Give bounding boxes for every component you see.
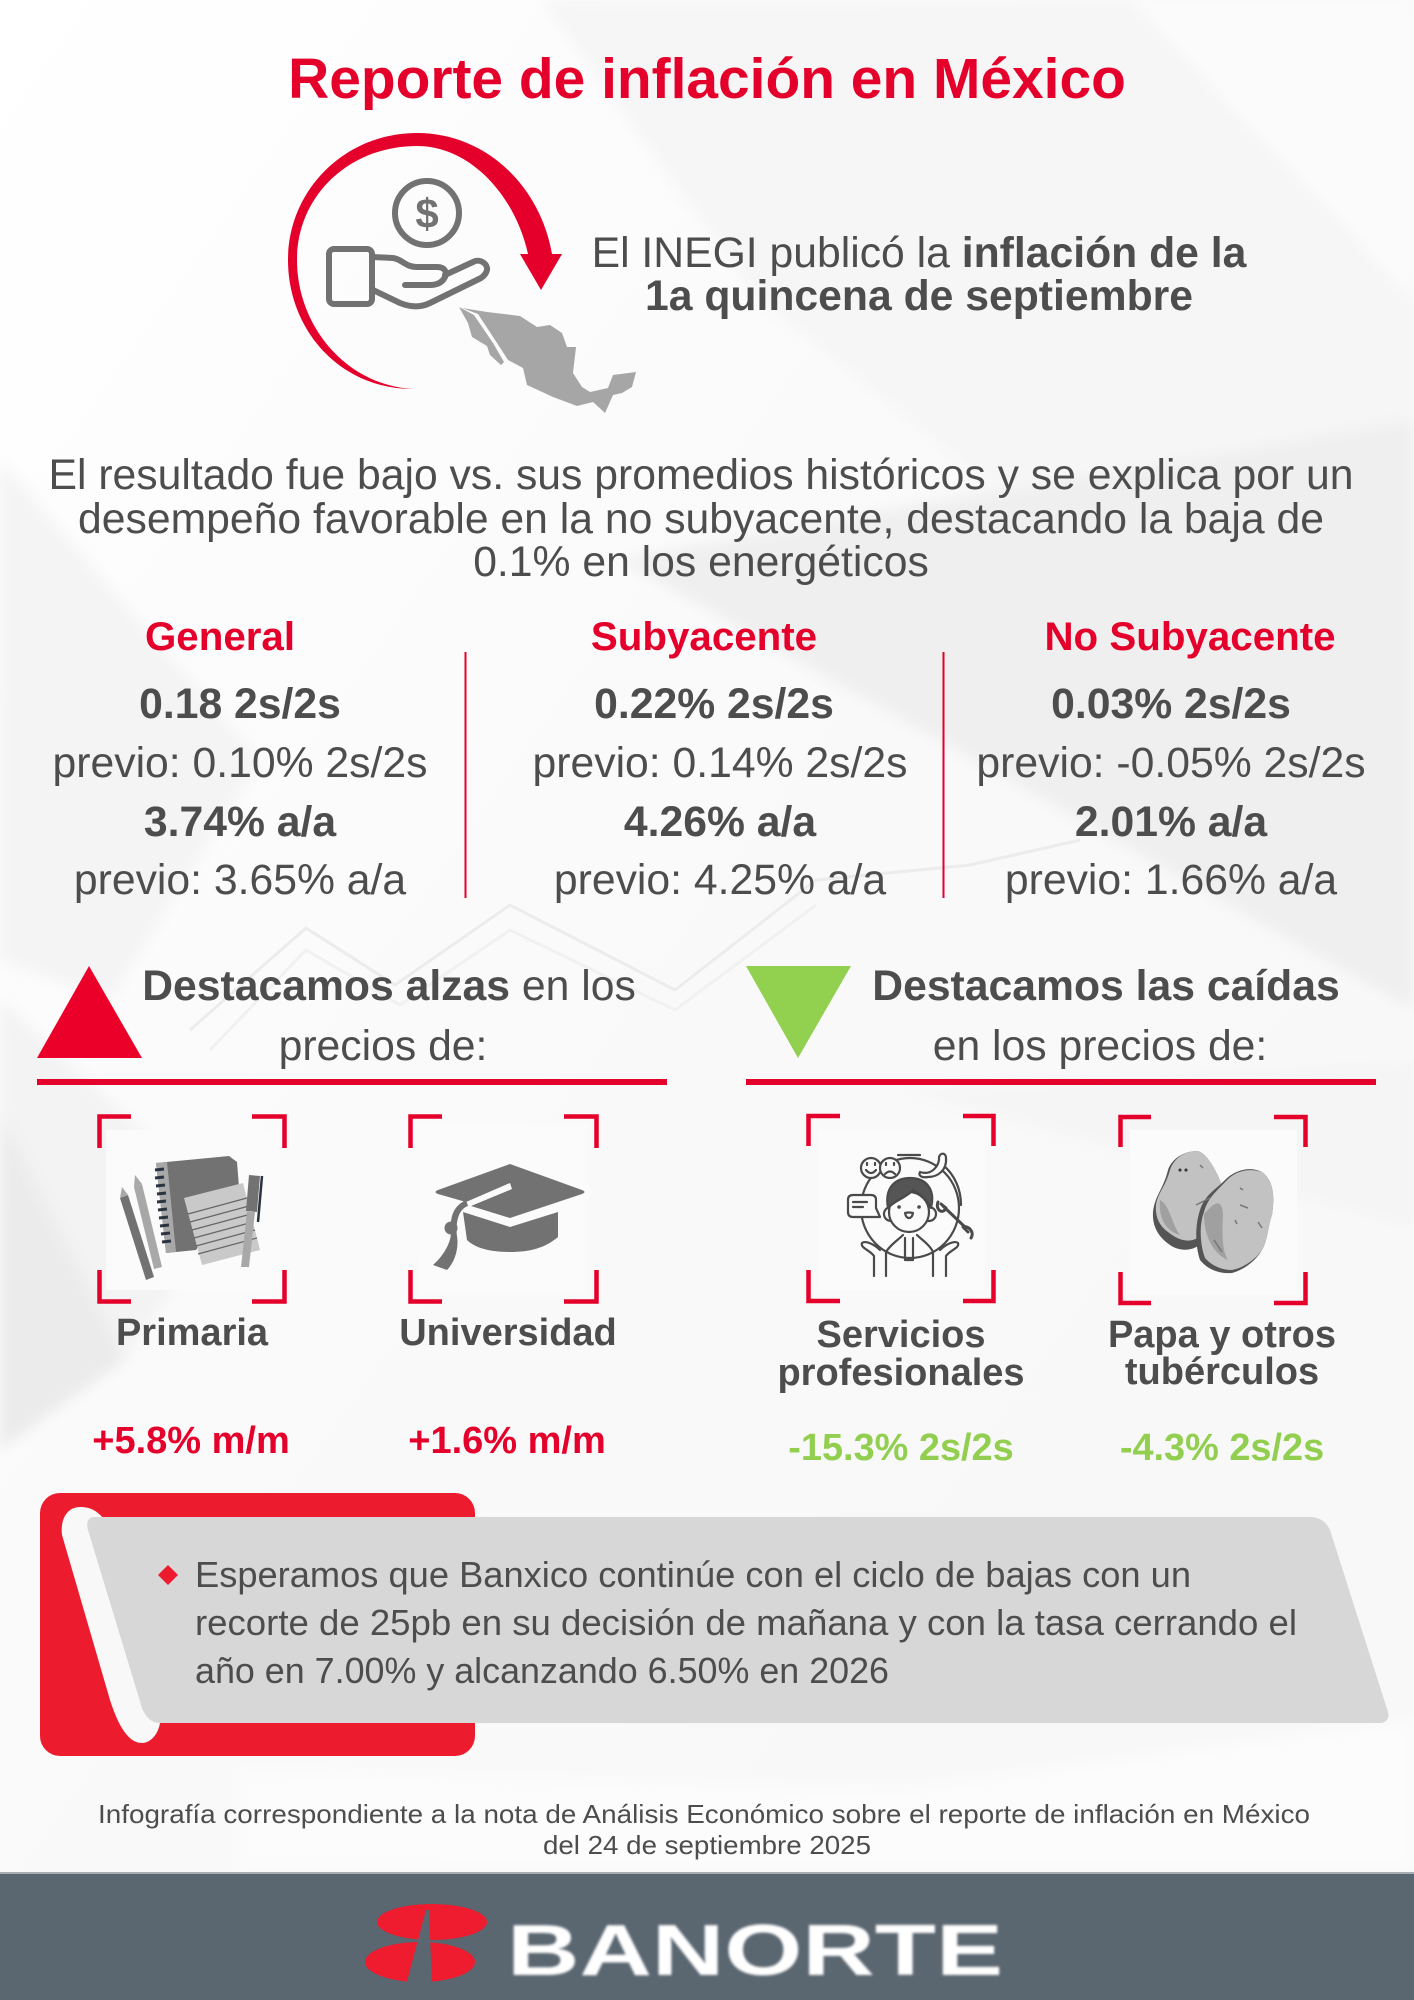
- bullet: [158, 1565, 178, 1585]
- icon: map of Mexico: [459, 307, 636, 413]
- heading: No Subyacente: No Subyacente: [1044, 614, 1336, 659]
- icon: potatoes: [1153, 1151, 1273, 1273]
- heading: caídas: Destacamos las caídas: [872, 962, 1340, 1010]
- heading: alzas: Destacamos alzas en los: [142, 962, 636, 1010]
- label: Papa y otros tubérculos: Papa y otros: [1108, 1314, 1336, 1356]
- heading: caídas: en los precios de:: [933, 1022, 1267, 1070]
- icon: service person: [848, 1154, 972, 1276]
- label: Servicios profesionales: Servicios: [816, 1314, 986, 1356]
- panel: General: [53, 614, 427, 904]
- intro text: [592, 229, 1248, 320]
- footnote: del 24 de septiembre 2025: [543, 1830, 871, 1860]
- summary paragraph: [48, 451, 1354, 586]
- item: Papa y otros tubérculos: [1120, 1117, 1306, 1303]
- heading: General: General: [145, 614, 295, 659]
- panel: No Subyacente: [976, 614, 1366, 904]
- panel: General: 3.74% a/a: [144, 798, 337, 846]
- panel: No Subyacente: previo: 1.66% a/a: [1005, 856, 1337, 904]
- heading: caídas: [872, 962, 1340, 1070]
- summary paragraph: El resultado fue bajo vs. sus promedios históricos y se explica por un: [48, 451, 1354, 499]
- label: Papa y otros tubérculos: [1108, 1314, 1336, 1393]
- panel: caídas: [746, 962, 1376, 1469]
- panel: No Subyacente: 2.01% a/a: [1075, 798, 1268, 846]
- heading: Subyacente: Subyacente: [591, 614, 817, 659]
- icon: coin: [395, 181, 459, 245]
- panel: No Subyacente: 0.03% 2s/2s: [1051, 680, 1291, 728]
- icon: red up triangle: [37, 966, 142, 1058]
- panel: Subyacente: 0.22% 2s/2s: [594, 680, 834, 728]
- item: Servicios profesionales: [808, 1116, 994, 1301]
- callout text: recorte de 25pb en su decisión de mañana y con la tasa cerrando el: [195, 1602, 1297, 1643]
- footer bar: [0, 1872, 1414, 2000]
- label: Servicios profesionales: profesionales: [777, 1352, 1025, 1394]
- panel: General: 0.18 2s/2s: [139, 680, 341, 728]
- panel: alzas: [37, 962, 667, 1462]
- panel: General: previo: 3.65% a/a: [74, 856, 406, 904]
- callout text: [195, 1554, 1297, 1691]
- panel: General: previo: 0.10% 2s/2s: [53, 739, 427, 787]
- label: Papa y otros tubérculos: tubérculos: [1125, 1351, 1319, 1393]
- summary paragraph: 0.1% en los energéticos: [473, 538, 929, 586]
- logo: Banorte symbol: [360, 1904, 490, 1985]
- logo: Banorte wordmark: BANORTE: [507, 1911, 1003, 1991]
- panel: No Subyacente: previo: -0.05% 2s/2s: [976, 739, 1366, 787]
- icon: notebooks and pencils: [120, 1156, 262, 1280]
- footnote: [98, 1799, 1310, 1860]
- footnote: Infografía correspondiente a la nota de Análisis Económico sobre el reporte de inflación en México: [98, 1799, 1310, 1829]
- callout: Banxico: [40, 1493, 1389, 1756]
- title: Reporte de inflación en México: [288, 47, 1126, 111]
- panel: Subyacente: 4.26% a/a: [624, 798, 817, 846]
- icon: green down triangle: [746, 966, 851, 1058]
- label: Universidad: Universidad: [399, 1312, 617, 1354]
- label: Primaria: Primaria: [116, 1312, 269, 1354]
- value: Servicios: -15.3% 2s/2s: [788, 1427, 1014, 1469]
- summary paragraph: desempeño favorable en la no subyacente, destacando la baja de: [78, 495, 1324, 543]
- item: Universidad: [410, 1116, 596, 1302]
- panel: Subyacente: previo: 4.25% a/a: [554, 856, 886, 904]
- heading: alzas: precios de:: [279, 1022, 487, 1070]
- icon: hand with coin, arrow and map of Mexico: [288, 133, 636, 413]
- callout text: Esperamos que Banxico continúe con el ciclo de bajas con un: [195, 1554, 1191, 1595]
- item: Primaria: [100, 1116, 284, 1302]
- icon: coin: $: [415, 190, 439, 237]
- icon: red curved arrow: [288, 133, 562, 389]
- callout text: año en 7.00% y alcanzando 6.50% en 2026: [195, 1650, 889, 1691]
- intro text: El INEGI publicó la inflación de la: [592, 229, 1248, 277]
- label: Servicios profesionales: [777, 1314, 1025, 1394]
- intro text: 1a quincena de septiembre: [645, 272, 1193, 320]
- icon: graduation cap: [433, 1164, 584, 1270]
- heading: alzas: [142, 962, 636, 1070]
- icon: hand: [329, 249, 487, 306]
- panel: Subyacente: [533, 614, 907, 904]
- value: Universidad: +1.6% m/m: [408, 1420, 606, 1462]
- value: Primaria: +5.8% m/m: [92, 1420, 290, 1462]
- panel: Subyacente: previo: 0.14% 2s/2s: [533, 739, 907, 787]
- value: Papa: -4.3% 2s/2s: [1120, 1427, 1324, 1469]
